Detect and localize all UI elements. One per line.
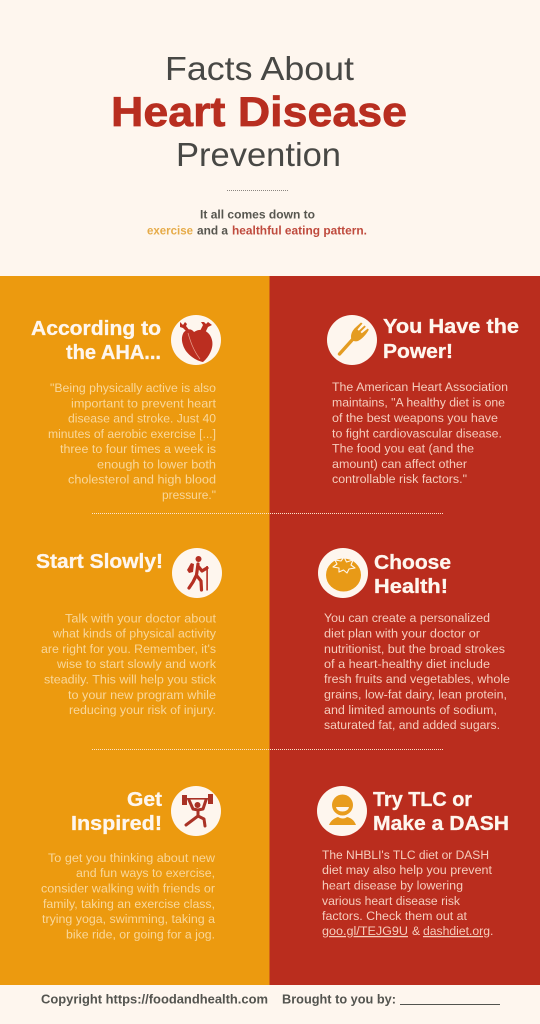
body text: You can create a personalized [324,611,490,625]
body text: steadily. This will help you stick [44,672,217,686]
body text: diet may also help you prevent [322,863,493,877]
heading: Start Slowly! [36,551,163,573]
section: choose health [318,548,510,732]
heading: Power! [383,341,453,363]
body text: cholesterol and high blood [68,472,216,486]
section: start slowly [36,548,222,717]
header [111,50,407,238]
body text: grains, low-fat dairy, lean protein, [324,688,507,702]
heading: Choose [374,552,451,574]
body text: diet plan with your doctor or [324,626,480,640]
body text: to fight cardiovascular disease. [332,426,502,440]
section: try TLC or make a DASH [317,786,509,938]
subtitle: healthful eating pattern. [232,224,367,238]
footer: Copyright https://foodandhealth.com [41,992,268,1006]
heading [71,789,162,835]
section: you have the power [327,315,519,486]
body text: fresh fruits and vegetables, whole [324,672,510,686]
title: Prevention [176,136,341,173]
body text: important to prevent heart [71,396,217,410]
icon: fork [327,315,377,365]
subtitle: and a [197,224,228,238]
body text: nutritionist, but the broad strokes [324,642,505,656]
title: Facts About [165,50,354,87]
body text: minutes of aerobic exercise [...] [48,427,216,441]
body text: consider walking with friends or [41,882,215,896]
body text: and limited amounts of sodium, [324,703,497,717]
body text: saturated fat, and added sugars. [324,718,500,732]
body text: of the best weapons you have [332,411,498,425]
body text: three to four times a week is [60,442,216,456]
body text: enough to lower both [97,458,216,472]
heading [31,318,161,364]
body text: Talk with your doctor about [65,612,217,626]
body text: bike ride, or going for a jog. [66,928,215,942]
heading: You Have the [383,316,519,338]
panel: diet column [270,276,540,985]
body text: The NHBLI's TLC diet or DASH [322,848,489,862]
heading: the AHA... [66,342,161,364]
body text: & [412,924,420,938]
body text: goo.gl/TEJG9U [322,924,408,938]
body text: heart disease by lowering [322,878,463,892]
icon: tomato [318,548,368,598]
body text: various heart disease risk [322,894,461,908]
body text: dashdiet.org [423,924,490,938]
subtitle: exercise [147,224,193,238]
heading [374,552,451,598]
body text [322,848,493,938]
subtitle: It all comes down to [200,208,315,222]
heading: Make a DASH [373,813,509,835]
icon: hiker [172,548,222,598]
body text [48,381,217,502]
body text: are right for you. Remember, it's [41,642,216,656]
heading: Inspired! [71,813,162,835]
heading: Get [127,789,162,811]
section: get inspired [41,786,221,942]
body text: of a heart-healthy diet include [324,657,490,671]
body text: pressure." [162,488,216,502]
body text [332,380,508,486]
body text: to your new program while [68,688,216,702]
body text: maintains, "A healthy diet is one [332,396,505,410]
heading: Try TLC or [373,789,472,811]
body text: controllable risk factors." [332,472,467,486]
body text: wise to start slowly and work [56,657,217,671]
panel: exercise column [0,276,270,985]
body text: family, taking an exercise class, [43,897,215,911]
body text: what kinds of physical activity [52,626,217,640]
body text: and fun ways to exercise, [76,866,215,880]
heading: According to [31,318,161,340]
body text: "Being physically active is also [50,381,216,395]
body text: trying yoga, swimming, taking a [42,912,215,926]
body text: The American Heart Association [332,380,508,394]
body text: amount) can affect other [332,457,467,471]
body text: The food you eat (and the [332,442,474,456]
body text: factors. Check them out at [322,909,468,923]
heading [383,316,519,363]
footer: Brought to you by: [282,992,396,1006]
body text: To get you thinking about new [48,851,215,865]
title: Heart Disease [111,88,407,135]
body text: . [490,924,493,938]
body text: disease and stroke. Just 40 [68,412,216,426]
title [111,50,407,173]
icon: heart [171,315,221,365]
heading: Health! [374,576,448,598]
body text [41,612,217,717]
subtitle [147,208,367,238]
section: according to the AHA [31,315,221,502]
icon: weightlifter [171,786,221,836]
icon: smiling person [317,786,367,836]
body text: reducing your risk of injury. [69,703,216,717]
body text [41,851,215,942]
heading [373,789,509,835]
footer [41,992,500,1006]
body text [324,611,510,732]
